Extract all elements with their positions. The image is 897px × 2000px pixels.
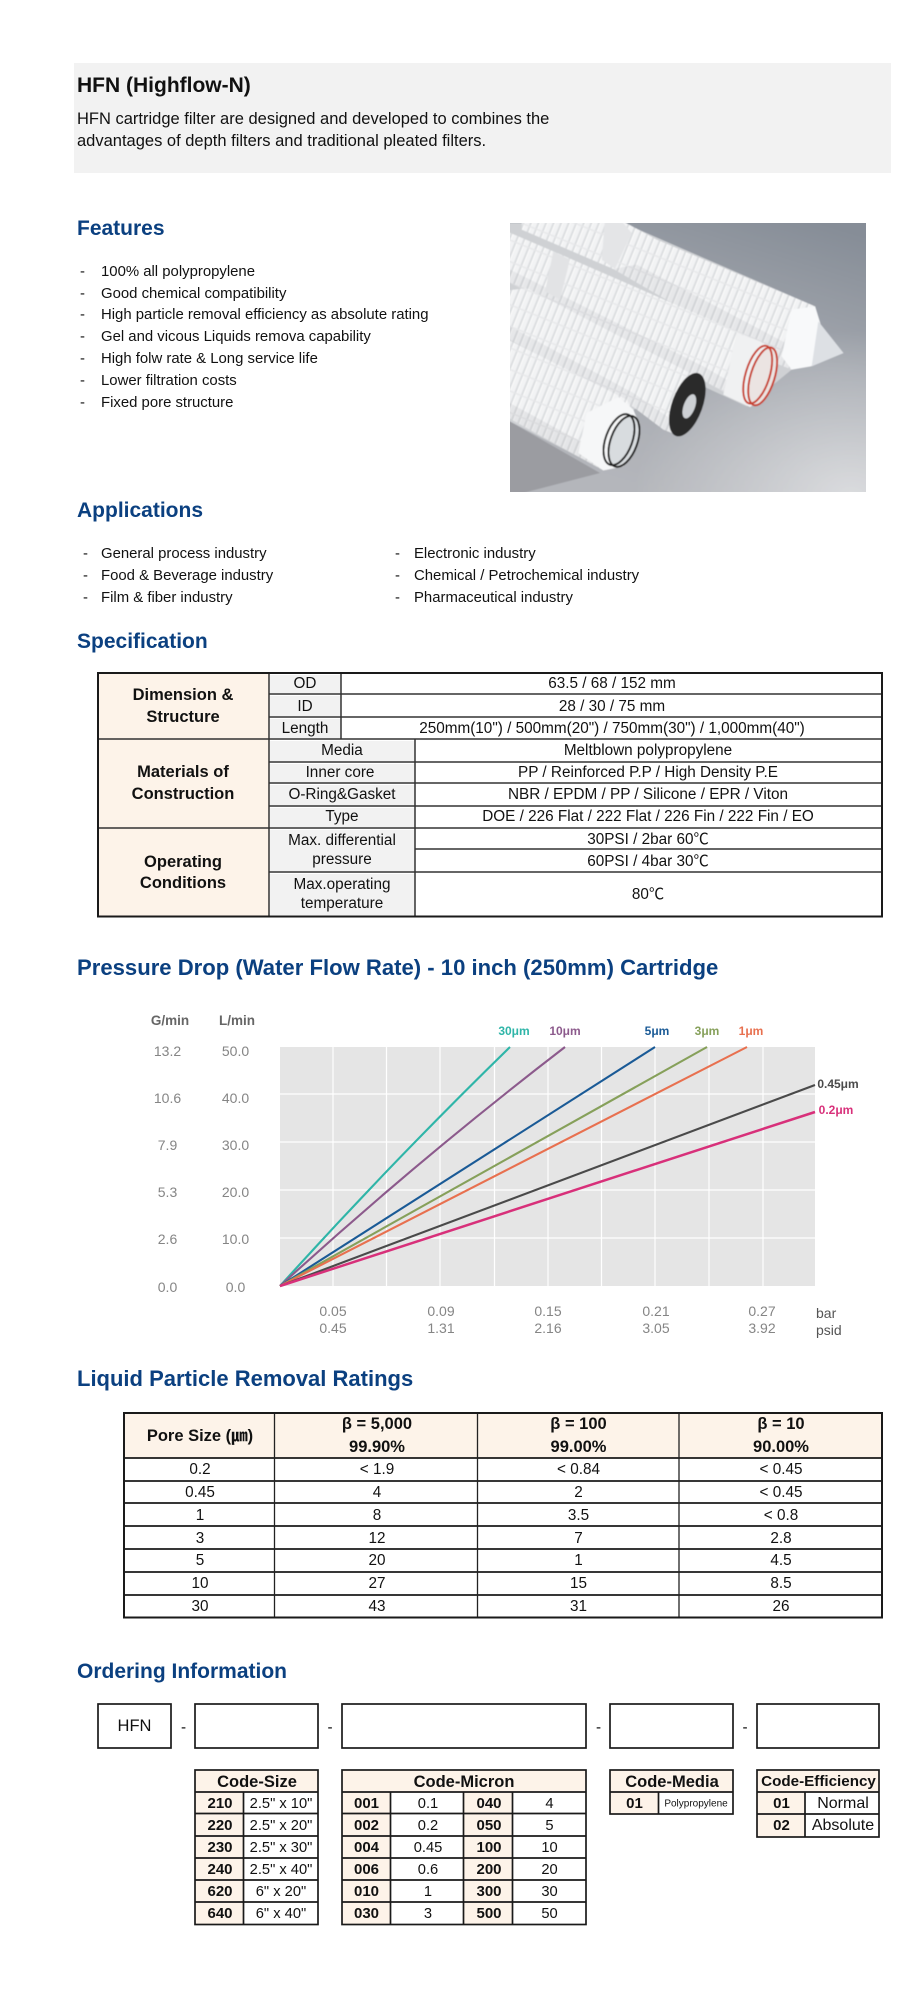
table: code-micron: 0.6: [418, 1862, 438, 1878]
heading: ordering information: Ordering Information: [77, 1660, 287, 1683]
spec row group: operating conditions: 60PSI / 4bar 30℃: [587, 853, 709, 870]
spec row group: operating conditions: Max. differential: [288, 832, 396, 849]
ordering code boxes: -: [596, 1719, 601, 1736]
features list: -: [80, 307, 85, 323]
table: code-micron: 500: [476, 1905, 502, 1922]
spec row group: dimension and structure: 28 / 30 / 75 mm: [559, 698, 665, 715]
features list: -: [80, 351, 85, 367]
table rows: 26: [772, 1598, 790, 1615]
y axis labels: 40.0: [222, 1090, 249, 1106]
spec row group: materials of construction: Type: [325, 808, 359, 825]
table: code-micron: 040: [476, 1795, 502, 1812]
removal ratings table: [124, 1413, 882, 1618]
table rows: 5: [196, 1552, 204, 1569]
table: code-size: 230: [207, 1839, 233, 1856]
table: code-efficiency: 01: [773, 1795, 790, 1812]
y axis labels: [151, 1013, 255, 1295]
features list: High folw rate & Long service life: [101, 351, 318, 367]
table rows: 31: [570, 1598, 587, 1615]
applications list: -: [83, 568, 88, 584]
heading: features: Features: [77, 217, 165, 240]
x axis labels: 0.15: [534, 1303, 562, 1319]
table: code-media: Polypropylene: [664, 1798, 728, 1810]
table rows: 8.5: [770, 1575, 792, 1592]
table rows: 4.5: [770, 1552, 792, 1569]
table rows: 0.2: [189, 1461, 211, 1478]
applications list: General process industry: [101, 546, 267, 562]
spec row group: operating conditions: [140, 831, 709, 912]
table: code-size: [195, 1770, 318, 1924]
spec row group: dimension and structure: Structure: [146, 708, 220, 726]
spec row group: materials of construction: PP / Reinforced P.P / High Density P.E: [518, 764, 778, 781]
table rows: 20: [368, 1552, 386, 1569]
applications list: Chemical / Petrochemical industry: [414, 568, 640, 584]
table header: β = 10: [757, 1415, 805, 1433]
y axis labels: 50.0: [222, 1043, 249, 1059]
features list: Good chemical compatibility: [101, 286, 287, 302]
table header: [147, 1415, 809, 1456]
y axis labels: G/min: [151, 1013, 189, 1028]
table: code-micron: 100: [476, 1839, 502, 1856]
table: code-micron: 30: [541, 1884, 558, 1900]
y axis labels: 7.9: [158, 1137, 177, 1153]
table: code-size: 2.5" x 10": [250, 1796, 312, 1812]
table: code-size: 220: [207, 1817, 233, 1834]
spec row group: operating conditions: 80℃: [632, 886, 664, 903]
table rows: 2.8: [770, 1530, 792, 1547]
table: code-micron: 5: [545, 1818, 554, 1834]
table rows: 30: [191, 1598, 209, 1615]
x axis labels: 3.05: [642, 1320, 670, 1336]
line legend labels: 1μm: [739, 1024, 763, 1038]
spec row group: dimension and structure: 250mm(10") / 500mm(20") / 750mm(30") / 1,000mm(40"): [419, 720, 805, 737]
table: code-micron: 010: [354, 1883, 379, 1900]
applications list: Film & fiber industry: [101, 590, 233, 606]
table rows: 1: [196, 1507, 204, 1524]
applications list: Pharmaceutical industry: [414, 590, 573, 606]
table: code-efficiency: Code-Efficiency: [761, 1773, 876, 1790]
features list: Fixed pore structure: [101, 395, 233, 411]
features list: High particle removal efficiency as absolute rating: [101, 307, 428, 323]
chart lines: [280, 1047, 815, 1286]
table: code-micron: 10: [541, 1840, 558, 1856]
intro text: HFN cartridge filter are designed and developed to combines the: [77, 110, 549, 128]
table rows: < 1.9: [360, 1461, 394, 1478]
table header: 90.00%: [753, 1438, 809, 1456]
table rows: 2: [574, 1484, 583, 1501]
line legend labels: 30μm: [498, 1024, 530, 1038]
title: HFN (Highflow-N): [77, 74, 251, 97]
line legend labels: [498, 1024, 859, 1117]
line legend labels: 0.45μm: [817, 1077, 859, 1091]
heading: pressure drop: Pressure Drop (Water Flow Rate) - 10 inch (250mm) Cartridge: [77, 955, 718, 980]
features list: -: [80, 395, 85, 411]
features list: Lower filtration costs: [101, 373, 237, 389]
line legend labels: 0.2μm: [819, 1103, 853, 1117]
intro text: advantages of depth filters and traditional pleated filters.: [77, 132, 486, 150]
ordering code boxes: -: [742, 1719, 748, 1736]
applications list: -: [395, 590, 400, 606]
x axis labels: 0.21: [642, 1303, 670, 1319]
table: code-efficiency: [757, 1770, 879, 1837]
table: code-efficiency: Normal: [817, 1795, 869, 1812]
table rows: 7: [574, 1530, 583, 1547]
photo: filter cartridges: [510, 223, 866, 492]
spec row group: materials of construction: Inner core: [306, 764, 374, 781]
applications list: [83, 546, 640, 606]
table: code-micron: 20: [541, 1862, 558, 1878]
spec row group: dimension and structure: [133, 675, 805, 737]
line legend labels: 10μm: [549, 1024, 581, 1038]
table rows: 3: [196, 1530, 204, 1547]
spec row group: operating conditions: Operating: [144, 853, 222, 871]
y axis labels: 2.6: [158, 1231, 177, 1247]
table: code-size: 2.5" x 20": [250, 1818, 312, 1834]
x axis labels: 1.31: [427, 1320, 455, 1336]
x axis labels: bar: [816, 1305, 837, 1321]
ordering code boxes: HFN: [118, 1717, 151, 1735]
table: code-micron: 050: [476, 1817, 502, 1834]
spec row group: dimension and structure: Length: [282, 720, 328, 737]
table: code-media: [610, 1770, 733, 1814]
table: code-micron: 300: [476, 1883, 502, 1900]
table: code-micron: 001: [354, 1795, 379, 1812]
table: code-micron: 0.2: [418, 1818, 438, 1834]
panel: intro: [74, 63, 891, 173]
table: code-size: 240: [207, 1861, 233, 1878]
spec row group: materials of construction: Media: [321, 742, 363, 759]
table rows: 10: [191, 1575, 209, 1592]
x axis labels: 2.16: [534, 1320, 562, 1336]
table: code-micron: 004: [354, 1839, 380, 1856]
ordering code boxes: [98, 1704, 879, 1748]
applications list: -: [83, 590, 88, 606]
table rows: < 0.45: [760, 1461, 802, 1478]
spec row group: operating conditions: Conditions: [140, 874, 226, 892]
y axis labels: 10.6: [154, 1090, 181, 1106]
spec row group: materials of construction: DOE / 226 Flat / 222 Flat / 226 Fin / 222 Fin / EO: [482, 808, 814, 825]
table: code-efficiency: Absolute: [812, 1817, 874, 1834]
y axis labels: 10.0: [222, 1231, 249, 1247]
spec row group: dimension and structure: 63.5 / 68 / 152 mm: [548, 675, 676, 692]
x axis labels: 0.09: [427, 1303, 455, 1319]
applications list: Electronic industry: [414, 546, 536, 562]
table header: 99.90%: [349, 1438, 405, 1456]
x axis labels: 3.92: [748, 1320, 776, 1336]
applications list: -: [395, 568, 400, 584]
spec row group: operating conditions: pressure: [312, 851, 372, 868]
spec row group: operating conditions: temperature: [301, 895, 383, 912]
line legend labels: 3μm: [695, 1024, 719, 1038]
table: code-media: 01: [626, 1795, 643, 1812]
table: code-micron: 0.45: [414, 1840, 442, 1856]
spec row group: materials of construction: NBR / EPDM / PP / Silicone / EPR / Viton: [508, 786, 788, 803]
y axis labels: 30.0: [222, 1137, 249, 1153]
y axis labels: L/min: [219, 1013, 255, 1028]
features list: -: [80, 264, 85, 280]
table: code-micron: 3: [424, 1906, 432, 1922]
table: code-size: 620: [207, 1883, 233, 1900]
table: code-size: 640: [207, 1905, 233, 1922]
y axis labels: 0.0: [226, 1279, 245, 1295]
table: code-micron: 200: [476, 1861, 502, 1878]
features list: 100% all polypropylene: [101, 264, 255, 280]
features list: -: [80, 373, 85, 389]
table rows: 43: [368, 1598, 386, 1615]
line chart: pressure drop: [151, 1013, 859, 1338]
y axis labels: 13.2: [154, 1043, 181, 1059]
x axis labels: psid: [816, 1322, 842, 1338]
table rows: 3.5: [568, 1507, 589, 1524]
x axis labels: 0.45: [319, 1320, 347, 1336]
table rows: 1: [574, 1552, 583, 1569]
spec row group: materials of construction: Materials of: [137, 763, 229, 781]
x axis labels: [319, 1303, 842, 1338]
heading: applications: Applications: [77, 499, 203, 522]
spec row group: materials of construction: Meltblown polypropylene: [564, 742, 732, 759]
table header: 99.00%: [551, 1438, 607, 1456]
table rows: 12: [368, 1530, 386, 1547]
table header: Pore Size (㎛): [147, 1427, 253, 1446]
table header: β = 100: [550, 1415, 607, 1433]
applications list: Food & Beverage industry: [101, 568, 274, 584]
applications list: -: [83, 546, 88, 562]
table: code-size: 2.5" x 30": [250, 1840, 312, 1856]
table header: β = 5,000: [342, 1415, 412, 1433]
table rows: 27: [368, 1575, 386, 1592]
table: code-size: 210: [207, 1795, 233, 1812]
table: code-micron: 0.1: [418, 1796, 438, 1812]
ordering code boxes: -: [181, 1719, 186, 1736]
table: code-size: Code-Size: [217, 1773, 297, 1791]
table: code-micron: 006: [354, 1861, 379, 1878]
specification table: [98, 673, 882, 916]
table: code-micron: 002: [354, 1817, 379, 1834]
applications list: -: [395, 546, 400, 562]
y axis labels: 0.0: [158, 1279, 177, 1295]
table rows: < 0.8: [764, 1507, 798, 1524]
table: code-efficiency: 02: [773, 1817, 790, 1834]
ordering code boxes: -: [327, 1719, 333, 1736]
spec row group: materials of construction: [132, 742, 814, 825]
spec row group: dimension and structure: OD: [294, 675, 316, 692]
table: code-micron: 50: [541, 1906, 558, 1922]
intro text: [77, 110, 549, 150]
line legend labels: 5μm: [645, 1024, 669, 1038]
table rows: 0.45: [185, 1484, 215, 1501]
table: code-micron: Code-Micron: [414, 1773, 514, 1791]
table: code-size: 6" x 20": [256, 1884, 306, 1900]
spec row group: operating conditions: 30PSI / 2bar 60℃: [587, 831, 709, 848]
heading: liquid particle removal ratings: Liquid Particle Removal Ratings: [77, 1366, 413, 1391]
features list: -: [80, 286, 85, 302]
table: code-size: 2.5" x 40": [250, 1862, 312, 1878]
table: code-micron: 030: [354, 1905, 379, 1922]
spec row group: operating conditions: Max.operating: [294, 876, 390, 893]
x axis labels: 0.27: [748, 1303, 776, 1319]
x axis labels: 0.05: [319, 1303, 347, 1319]
table: code-media: Code-Media: [625, 1773, 720, 1791]
table: code-size: 6" x 40": [256, 1906, 306, 1922]
table rows: 15: [570, 1575, 587, 1592]
table: code-micron: 1: [424, 1884, 432, 1900]
y axis labels: 5.3: [158, 1184, 177, 1200]
features list: [80, 264, 428, 411]
spec row group: materials of construction: O-Ring&Gasket: [288, 786, 396, 803]
table rows: 8: [373, 1507, 381, 1524]
y axis labels: 20.0: [222, 1184, 249, 1200]
table: code-micron: [342, 1770, 586, 1924]
features list: -: [80, 329, 85, 345]
table: code-micron: 4: [545, 1796, 554, 1812]
table rows: < 0.84: [557, 1461, 600, 1478]
spec row group: dimension and structure: ID: [297, 698, 313, 715]
table rows: < 0.45: [760, 1484, 802, 1501]
table rows: 4: [373, 1484, 382, 1501]
heading: specification: Specification: [77, 630, 208, 653]
table rows: [185, 1461, 802, 1615]
spec row group: dimension and structure: Dimension &: [133, 686, 233, 704]
features list: Gel and vicous Liquids remova capability: [101, 329, 371, 345]
spec row group: materials of construction: Construction: [132, 785, 234, 803]
